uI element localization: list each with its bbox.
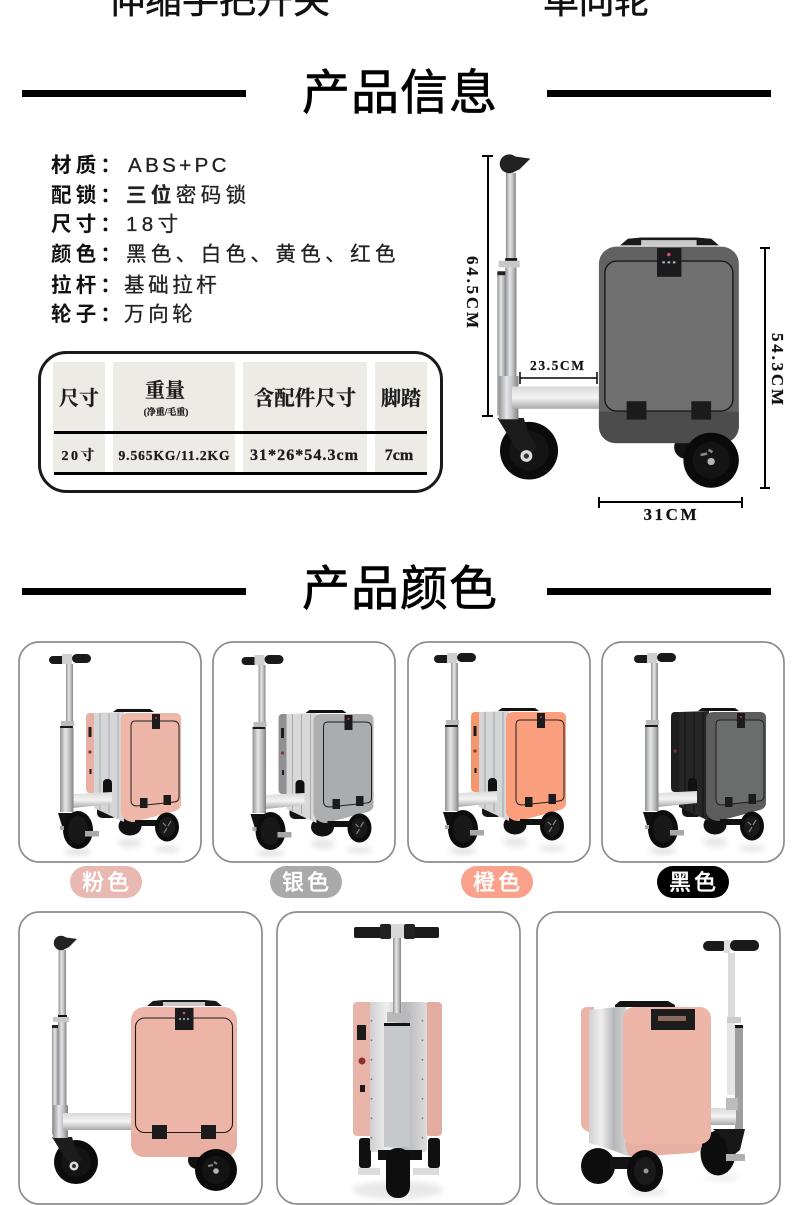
spec list: 轮子： [51, 303, 125, 326]
spec list: 材质： [51, 154, 125, 177]
heading: product colors: 产品颜色 [302, 563, 497, 616]
spec table: (净重/毛重) [144, 406, 188, 417]
color tag: orange: 橙色 [473, 870, 523, 895]
dimension: height 64.5CM [463, 156, 493, 416]
dimension: width 31CM [599, 497, 742, 524]
spec table: 尺寸 [59, 387, 99, 410]
panel: pink rear three-quarter view [537, 912, 780, 1204]
panel: silver scooter [213, 642, 395, 862]
dimension: deck 23.5CM [520, 358, 597, 384]
spec table: 9.565KG/11.2KG [118, 448, 230, 463]
dark scooter side view [497, 154, 739, 488]
spec list: 尺寸： [51, 213, 125, 236]
color tag: black [657, 866, 729, 898]
spec table: 7cm [385, 447, 414, 464]
spec list: 18寸 [126, 213, 183, 236]
color tag: silver: 银色 [282, 870, 332, 895]
color tag: orange [461, 866, 533, 898]
spec list [51, 154, 400, 326]
dimension: width 31CM: 31CM [644, 505, 696, 524]
spec list: ABS+PC [128, 154, 230, 177]
dimension: height 54.3CM: 54.3CM [768, 333, 787, 405]
color tag: pink [70, 866, 142, 898]
spec list: 基础拉杆 [124, 274, 220, 297]
panel: orange scooter [408, 642, 590, 862]
spec table: 重量 [145, 379, 185, 402]
color tag: pink: 粉色 [82, 870, 132, 895]
panel: pink side view [19, 912, 262, 1204]
spec table: 含配件尺寸 [254, 387, 356, 410]
dimension: height 64.5CM: 64.5CM [463, 256, 482, 328]
heading: product info: 产品信息 [302, 67, 497, 120]
spec list: 万向轮 [124, 303, 196, 326]
heading: product colors [22, 563, 771, 616]
dimension: deck 23.5CM: 23.5CM [530, 358, 584, 373]
spec table: 31*26*54.3cm [250, 447, 359, 464]
spec table [40, 352, 442, 492]
spec list: 颜色： [51, 243, 125, 266]
spec list: 三位密码锁 [126, 183, 251, 207]
spec table: 20寸 [62, 447, 94, 464]
heading: product info [22, 67, 771, 120]
dimension: height 54.3CM [760, 248, 787, 488]
panel: pink scooter [19, 642, 201, 862]
panel: pink rear view [277, 912, 520, 1204]
color tag: silver [270, 866, 342, 898]
color tag: black: 黑色 [669, 870, 719, 895]
spec list: 拉杆： [51, 273, 125, 297]
spec list: 配锁： [51, 184, 125, 207]
panel: black scooter [602, 642, 784, 862]
spec table: 脚踏 [381, 387, 421, 410]
spec list: 黑色、白色、黄色、红色 [126, 243, 400, 266]
